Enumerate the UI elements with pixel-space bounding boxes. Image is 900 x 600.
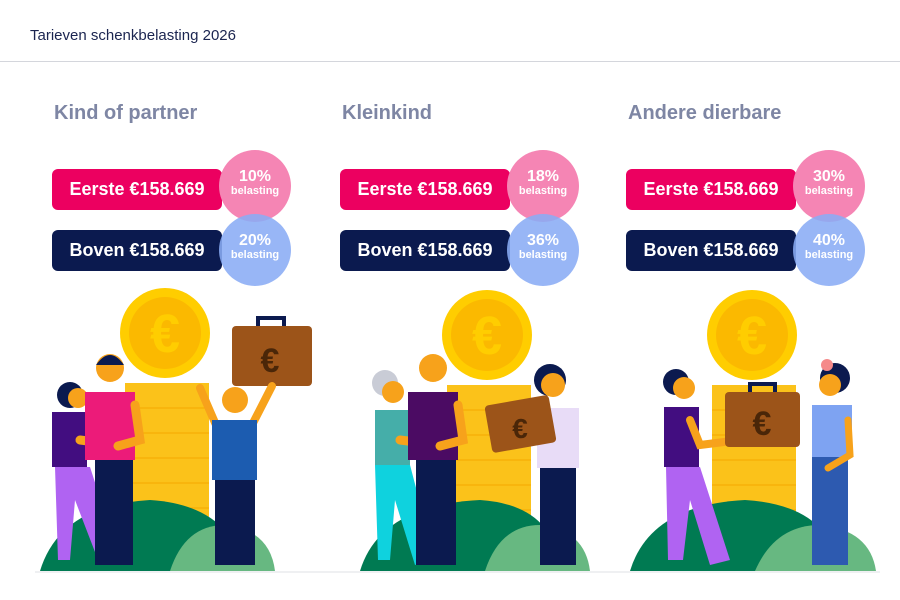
panel: kleinkind xyxy=(340,102,579,286)
illustration: kind of partner xyxy=(40,288,312,571)
circle 18%: belasting xyxy=(519,185,567,197)
circle 18% xyxy=(507,150,579,222)
panel: andere dierbare xyxy=(626,102,865,286)
bar boven: Boven €158.669 xyxy=(69,240,205,260)
bar eerste: Eerste €158.669 xyxy=(69,179,205,199)
panel: kind of partner xyxy=(52,102,291,286)
circle 36%: belasting xyxy=(519,249,567,261)
bar eerste xyxy=(626,169,796,210)
circle 18%: 18% xyxy=(527,168,559,185)
circle 20% xyxy=(219,214,291,286)
circle 36% xyxy=(507,214,579,286)
bar boven xyxy=(52,230,222,271)
bar boven xyxy=(626,230,796,271)
title: Tarieven schenkbelasting 2026 xyxy=(30,27,236,44)
heading: Andere dierbare xyxy=(628,102,781,124)
bar eerste xyxy=(340,169,510,210)
circle 30% xyxy=(793,150,865,222)
illustration: andere dierbare: € xyxy=(753,405,772,443)
bar eerste: Eerste €158.669 xyxy=(357,179,493,199)
bar boven: Boven €158.669 xyxy=(357,240,493,260)
circle 10% xyxy=(219,150,291,222)
circle 10%: 10% xyxy=(239,168,271,185)
circle 40%: belasting xyxy=(805,249,853,261)
heading: Kind of partner xyxy=(54,102,197,124)
bar eerste: Eerste €158.669 xyxy=(643,179,779,199)
heading: Kleinkind xyxy=(342,102,432,124)
circle 36%: 36% xyxy=(527,232,559,249)
man xyxy=(85,354,140,565)
bar boven: Boven €158.669 xyxy=(643,240,779,260)
illustration: kleinkind xyxy=(360,290,590,571)
circle 20%: 20% xyxy=(239,232,271,249)
boy with case: € xyxy=(261,342,280,380)
bar eerste xyxy=(52,169,222,210)
circle 10%: belasting xyxy=(231,185,279,197)
circle 30%: 30% xyxy=(813,168,845,185)
circle 30%: belasting xyxy=(805,185,853,197)
circle 40%: 40% xyxy=(813,232,845,249)
boy with case xyxy=(200,318,312,565)
woman xyxy=(52,382,120,565)
bar boven xyxy=(340,230,510,271)
circle 40% xyxy=(793,214,865,286)
circle 20%: belasting xyxy=(231,249,279,261)
illustration: kleinkind: € xyxy=(512,413,528,444)
illustration: andere dierbare xyxy=(630,290,876,571)
